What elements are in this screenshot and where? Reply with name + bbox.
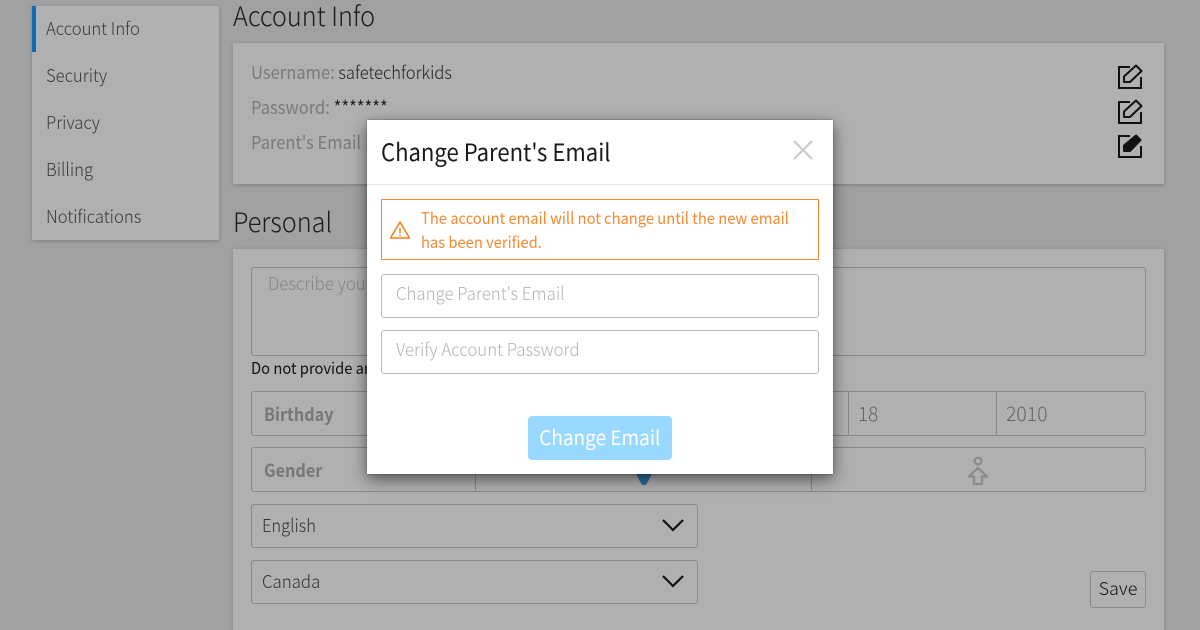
placeholder text: Verify Account Password [396,336,580,362]
country value: Canada [262,568,320,594]
nav item: Security: Security [46,62,107,88]
warning alert [381,199,819,260]
change email button [528,416,672,460]
icon: edit username [1118,64,1142,89]
placeholder text: Change Parent's Email [396,280,565,306]
input: change parent's email [381,274,819,318]
birthday divider: day [848,392,849,435]
icon: edit email active [1118,134,1142,158]
modal title: Change Parent's Email [381,133,611,168]
birthday field [251,391,1146,436]
heading: Personal: Personal [233,201,332,240]
panel: personal [233,249,1164,630]
birthday year: 2010 [1006,398,1048,427]
save button: Save [1099,575,1137,601]
password row: Password: ******* [251,94,388,120]
nav item: Notifications: Notifications [46,203,141,229]
privacy note: Do not provide any personal information [251,355,529,379]
nav item: Privacy: Privacy [46,109,100,135]
save button [1090,571,1146,608]
nav item: Billing: Billing [46,156,93,182]
parent's email row: Parent's Email [251,129,361,155]
icon: country chevron [662,575,684,588]
username row: Username: safetechforkids [251,59,452,85]
panel: account info [233,43,1164,184]
sidebar navigation panel [32,6,219,240]
icon: close [793,140,813,160]
active item accent bar [32,6,36,52]
icon: language chevron [662,519,684,532]
gender field [251,447,1146,492]
country select [251,560,698,604]
icon: male selected [636,474,652,485]
description placeholder: Describe yourself [268,270,398,296]
language select [251,504,698,548]
gender divider left [474,448,476,491]
change email button: Change Email [539,422,661,451]
header divider [367,184,833,185]
icon: edit password [1118,100,1142,124]
icon: female [968,456,988,486]
language value: English [262,512,316,538]
gender label: Gender [264,457,322,483]
birthday day: 18 [858,398,878,427]
gender divider right [810,448,812,491]
input: verify account password [381,330,819,374]
description textarea [251,267,1146,356]
alert text: The account email will not change until the new email [421,205,789,229]
alert text [421,205,789,253]
icon: warning triangle [390,221,410,239]
birthday label: Birthday [264,401,334,427]
alert text: has been verified. [421,229,542,253]
modal dialog [367,120,833,474]
birthday divider: year [996,392,997,435]
nav item: Account Info: Account Info [46,15,140,41]
